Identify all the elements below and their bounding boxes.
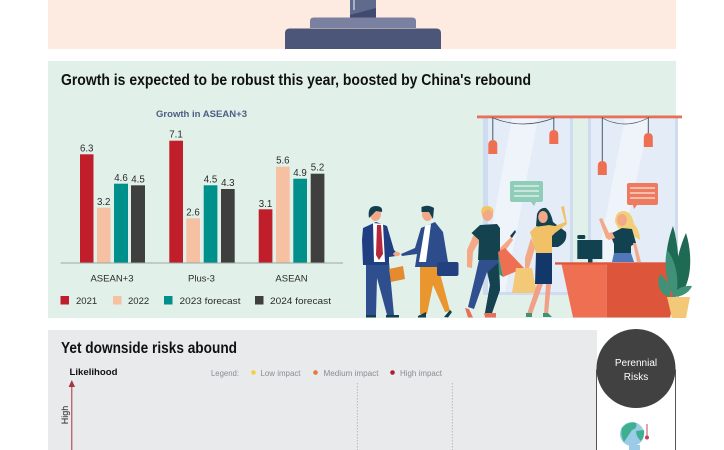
- chart title: Growth in ASEAN+3: [156, 109, 247, 119]
- axis label: high: High: [60, 406, 70, 424]
- bars: ASEAN+3: [80, 144, 145, 263]
- badge: perennial risks: Perennial: [615, 358, 657, 369]
- panel: growth: [48, 61, 692, 318]
- store windows: [483, 118, 678, 295]
- panel: perennial risks: [596, 329, 676, 450]
- bars: Plus-3: 4.5: [204, 174, 217, 186]
- shopping bag: yellow: [512, 268, 537, 293]
- illustration: store: [362, 116, 692, 318]
- panel: risks: [48, 330, 597, 450]
- risk legend: Low impact: [260, 369, 301, 378]
- chart legend: [60, 296, 331, 307]
- chart legend: 2022: [128, 296, 149, 307]
- axis labels: ASEAN: [275, 274, 308, 284]
- speech bubble: orange: [627, 183, 658, 209]
- reception counter: [555, 262, 682, 318]
- axis labels: ASEAN+3: [90, 274, 134, 284]
- heading: growth: Growth is expected to be robust this year, boosted by China's rebound: [61, 72, 531, 89]
- bars: ASEAN: 3.1: [259, 199, 272, 210]
- bars: ASEAN: 5.2: [311, 162, 324, 174]
- person: man handshake left: [362, 206, 405, 318]
- wires: [493, 118, 648, 124]
- axis labels: Plus-3: [188, 274, 215, 284]
- bars: Plus-3: 7.1: [169, 130, 183, 140]
- speech bubble: green: [510, 181, 543, 206]
- icon: pedestal base: [285, 0, 441, 49]
- rail: [477, 116, 682, 118]
- bars: ASEAN+3: 4.6: [114, 173, 128, 184]
- bars: ASEAN+3: 4.5: [131, 174, 145, 186]
- icon: globe with thermometer: [620, 422, 649, 450]
- bars: ASEAN: 4.9: [293, 168, 307, 179]
- bars: ASEAN+3: 3.2: [97, 197, 110, 208]
- badge: perennial risks: Risks: [624, 372, 648, 383]
- risk legend: High impact: [400, 369, 443, 378]
- bars: ASEAN: 5.6: [276, 156, 290, 166]
- chart legend: 2024 forecast: [270, 296, 331, 307]
- person: shopper woman: [525, 206, 567, 317]
- heading: risks: Yet downside risks abound: [61, 340, 237, 357]
- person: man handshake right: [393, 206, 458, 318]
- panel: top banner with pedestal: [48, 0, 676, 49]
- chart legend: 2023 forecast: [180, 296, 241, 307]
- plant in pot: [658, 226, 692, 318]
- axis labels: [90, 274, 308, 284]
- bars: Plus-3: 4.3: [221, 178, 235, 189]
- monitor and till: [577, 235, 602, 263]
- risk legend: [211, 369, 443, 378]
- bars: ASEAN: [259, 156, 324, 263]
- person: receptionist: [599, 211, 641, 262]
- bars: ASEAN+3: 6.3: [80, 144, 93, 154]
- badge: perennial risks: [596, 329, 676, 408]
- risk legend: Legend:: [211, 369, 239, 378]
- bar chart: [61, 130, 343, 284]
- chart legend: 2021: [76, 296, 97, 307]
- bars: Plus-3: 2.6: [186, 208, 200, 218]
- person: shopper man: [465, 206, 524, 318]
- hanging lamps: [488, 117, 653, 175]
- bars: Plus-3: [169, 130, 235, 263]
- arrow: likelihood axis: [69, 380, 75, 450]
- axis label: likelihood: Likelihood: [70, 367, 118, 377]
- risk legend: Medium impact: [324, 369, 379, 378]
